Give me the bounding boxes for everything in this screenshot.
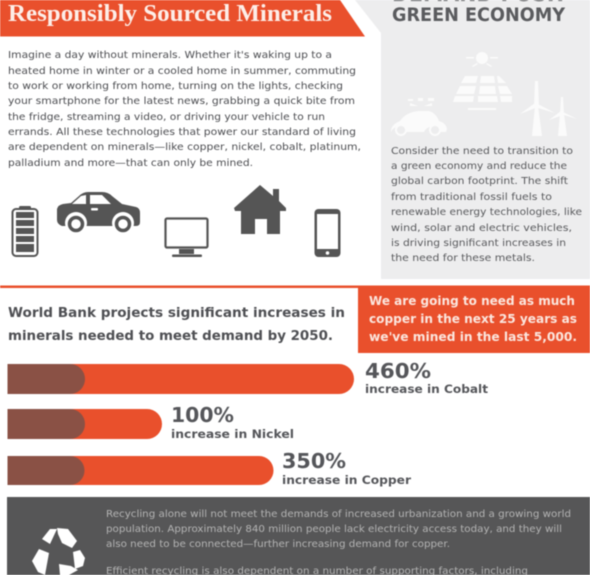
panel: recycling — [7, 497, 590, 575]
text: green economy body: wind, solar and electric vehicles, — [391, 223, 572, 234]
icon: recycling symbol — [32, 528, 85, 575]
text: intro paragraph: heated home in winter or a cooled home in summer, commuting — [8, 66, 356, 77]
icon: electric car — [391, 98, 447, 135]
heading: green economy: GREEN ECONOMY — [392, 4, 565, 26]
bar: copper: increase in Copper — [282, 473, 411, 487]
text: intro paragraph: errands. All these technologies that power our standard of living — [8, 127, 356, 138]
text: recycling body — [106, 509, 571, 575]
icon: monitor — [166, 218, 208, 257]
heading: world bank projections — [8, 306, 345, 344]
icon: battery — [12, 206, 38, 256]
heading: world bank projections: minerals needed to meet demand by 2050. — [8, 329, 333, 344]
bar: copper: 350% — [282, 449, 346, 473]
title banner — [0, 0, 365, 36]
text: intro paragraph — [8, 50, 361, 169]
callout: copper — [358, 287, 590, 353]
callout: copper: we've mined in the last 5,000. — [369, 330, 577, 344]
text: green economy body: renewable energy technologies, like — [391, 207, 582, 218]
text: recycling body: population. Approximately 840 million people lack electricity access today, and they will — [106, 524, 562, 535]
text: green economy body: a green economy and reduce the — [391, 161, 567, 172]
bar: copper — [8, 449, 411, 487]
icon: wind turbines — [520, 81, 577, 136]
bar: nickel: 100% — [171, 403, 234, 427]
text: green economy body: from traditional fossil fuels to — [391, 192, 552, 203]
panel: green economy — [355, 0, 590, 279]
text: intro paragraph: palladium and more—that can only be mined. — [8, 158, 253, 169]
text: intro paragraph: are dependent on minerals—like copper, nickel, cobalt, platinum, — [8, 142, 361, 153]
bar: nickel: increase in Nickel — [171, 427, 294, 441]
bar: cobalt: increase in Cobalt — [365, 382, 489, 396]
icon: sun and solar panel — [453, 52, 512, 110]
bar: cobalt: 460% — [365, 359, 431, 383]
bar: cobalt — [8, 359, 489, 396]
heading: world bank projections: World Bank projects significant increases in — [8, 306, 345, 321]
icon: car — [57, 192, 140, 234]
text: intro paragraph: your smartphone for the latest news, grabbing a quick bite from — [8, 96, 355, 107]
icon: house — [234, 185, 286, 234]
text: intro paragraph: Imagine a day without minerals. Whether it's waking up to a — [8, 50, 332, 61]
divider — [0, 286, 590, 288]
text: intro paragraph: to work or working from home, turning on the lights, checking — [8, 81, 343, 92]
text: recycling body: Recycling alone will not meet the demands of increased urbanization and a growing world — [106, 509, 571, 520]
text: green economy body: is driving significant increases in — [391, 238, 566, 249]
text: green economy body: Consider the need to transition to — [391, 146, 573, 157]
callout: copper: copper in the next 25 years as — [369, 312, 577, 326]
bar: nickel — [8, 403, 294, 441]
bar chart: mineral demand increases — [8, 359, 489, 487]
text: green economy body: the need for these metals. — [391, 253, 535, 264]
text: intro paragraph: the fridge, streaming a video, or driving your vehicle to run — [8, 112, 325, 123]
title banner: Responsibly Sourced Minerals — [8, 1, 332, 27]
text: recycling body: also need to be connected—further increasing demand for copper. — [106, 539, 450, 550]
text: green economy body: global carbon footprint. The shift — [391, 176, 568, 187]
text: green economy body — [391, 146, 582, 264]
callout: copper: We are going to need as much — [369, 294, 575, 308]
icon: smartphone — [314, 209, 340, 257]
